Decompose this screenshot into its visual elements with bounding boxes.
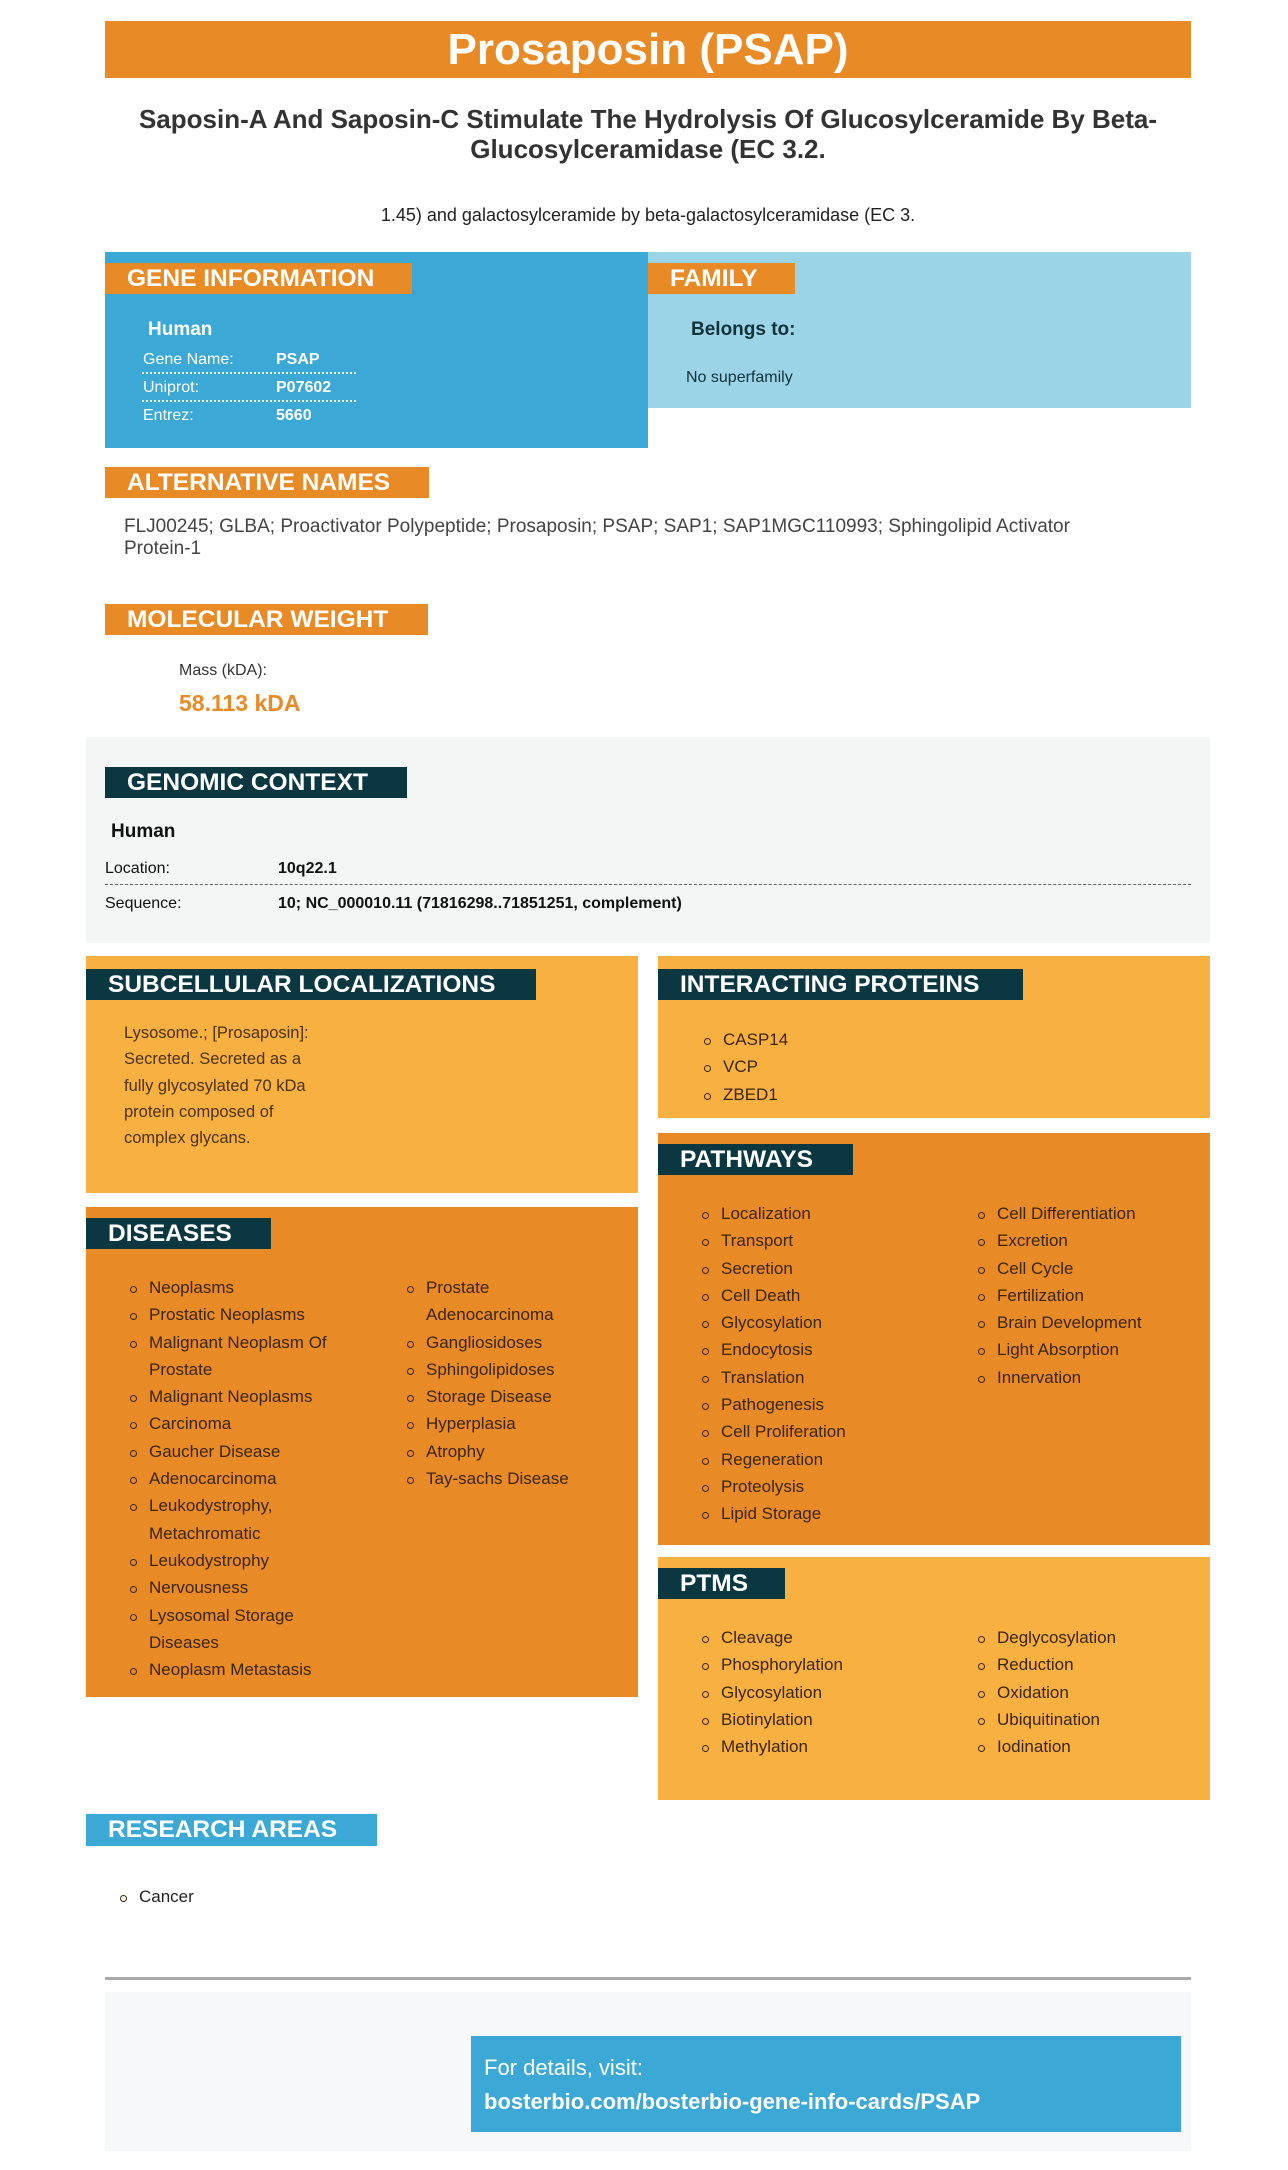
panel: ptms (658, 1557, 1210, 1800)
pathway list col 1: Regeneration (721, 1450, 823, 1469)
gene info text (142, 319, 356, 424)
ptm list col 2: Reduction (997, 1655, 1074, 1674)
heading: ptms (658, 1568, 785, 1599)
pathway list col 1 (702, 1204, 846, 1523)
footer panel (105, 1992, 1191, 2151)
family text: No superfamily (686, 369, 793, 386)
molecular weight value (179, 662, 300, 716)
subtitle: Saposin-A And Saposin-C Stimulate The Hydrolysis Of Glucosylceramide By Beta-Glucosylceramidase (EC 3.2. (139, 104, 1157, 164)
ptm list col 1: Glycosylation (721, 1683, 822, 1702)
disease list col 2: Prostate Adenocarcinoma (426, 1278, 554, 1324)
alternative names text: FLJ00245; GLBA; Proactivator Polypeptide; Prosaposin; PSAP; SAP1; SAP1MGC110993; Sphingolipid Activator Protein-1 (124, 516, 1070, 559)
disease list col 2: Tay-sachs Disease (426, 1469, 569, 1488)
panel: diseases (86, 1207, 638, 1697)
gene info text: Uniprot: (143, 379, 199, 396)
genomic details: 10q22.1 (278, 860, 337, 877)
panel: pathways (658, 1133, 1210, 1545)
heading: pathways (658, 1144, 853, 1175)
heading: gene information: GENE INFORMATION (127, 265, 374, 292)
heading: subcellular localizations: SUBCELLULAR LOCALIZATIONS (108, 971, 495, 998)
description: 1.45) and galactosylceramide by beta-galactosylceramidase (EC 3. (381, 205, 915, 225)
protein list: VCP (723, 1057, 758, 1076)
pathway list col 2: Fertilization (997, 1286, 1084, 1305)
disease list col 2: Storage Disease (426, 1387, 552, 1406)
protein list: CASP14 (723, 1030, 788, 1049)
callout: details link: For details, visit: (484, 2055, 643, 2080)
pathway list col 1: Proteolysis (721, 1477, 804, 1496)
heading: diseases: DISEASES (108, 1220, 232, 1247)
ptm list col 2: Ubiquitination (997, 1710, 1100, 1729)
disease list col 1: Neoplasm Metastasis (149, 1660, 312, 1679)
disease list col 1: Malignant Neoplasm Of Prostate (149, 1333, 327, 1379)
family text (686, 319, 796, 386)
genomic details: Human (111, 821, 175, 842)
research list: Cancer (139, 1887, 194, 1906)
ptm list col 1: Cleavage (721, 1628, 793, 1647)
pathway list col 1: Pathogenesis (721, 1395, 824, 1414)
genomic details: Sequence: (105, 895, 182, 912)
heading: family (648, 263, 795, 294)
pathway list col 1: Transport (721, 1231, 793, 1250)
pathway list col 1: Lipid Storage (721, 1504, 821, 1523)
disease list col 1: Leukodystrophy (149, 1551, 269, 1570)
gene info text: 5660 (276, 407, 312, 424)
molecular weight value: Mass (kDA): (179, 662, 267, 679)
disease list col 2: Gangliosidoses (426, 1333, 542, 1352)
disease list col 1: Lysosomal Storage Diseases (149, 1606, 294, 1652)
ptm list col 1: Biotinylation (721, 1710, 813, 1729)
gene info text: P07602 (276, 379, 331, 396)
pathway list col 2: Cell Differentiation (997, 1204, 1136, 1223)
heading: family: FAMILY (670, 265, 758, 292)
disease list col 2: Sphingolipidoses (426, 1360, 555, 1379)
ptm list col 1: Phosphorylation (721, 1655, 843, 1674)
callout: details link: bosterbio.com/bosterbio-gene-info-cards/PSAP (484, 2089, 980, 2114)
disease list col 1: Carcinoma (149, 1414, 231, 1433)
gene info text: Human (148, 319, 212, 340)
genomic details: 10; NC_000010.11 (71816298..71851251, complement) (278, 895, 682, 912)
title bar: Prosaposin (PSAP) (448, 25, 848, 74)
pathway list col 1: Glycosylation (721, 1313, 822, 1332)
heading: pathways: PATHWAYS (680, 1146, 813, 1173)
disease list col 2: Atrophy (426, 1442, 485, 1461)
heading: alternative names: ALTERNATIVE NAMES (127, 469, 390, 496)
disease list col 1: Malignant Neoplasms (149, 1387, 312, 1406)
disease list col 1: Neoplasms (149, 1278, 234, 1297)
pathway list col 1: Translation (721, 1368, 804, 1387)
panel: subcellular localizations (86, 956, 638, 1193)
pathway list col 2: Excretion (997, 1231, 1068, 1250)
disease list col 1: Gaucher Disease (149, 1442, 280, 1461)
gene info text: Entrez: (143, 407, 194, 424)
pathway list col 2: Light Absorption (997, 1340, 1119, 1359)
molecular weight value: 58.113 kDA (179, 690, 300, 716)
ptm list col 2: Oxidation (997, 1683, 1069, 1702)
callout: details link (471, 2036, 1181, 2132)
heading: interacting proteins: INTERACTING PROTEINS (680, 971, 979, 998)
pathway list col 2: Brain Development (997, 1313, 1142, 1332)
pathway list col 1: Endocytosis (721, 1340, 813, 1359)
genomic details (105, 821, 1191, 912)
heading: genomic context (105, 767, 407, 798)
pathway list col 1: Cell Proliferation (721, 1422, 846, 1441)
genomic details: Location: (105, 860, 170, 877)
panel: interacting proteins (658, 956, 1210, 1118)
heading: diseases (86, 1218, 271, 1249)
heading: genomic context: GENOMIC CONTEXT (127, 769, 368, 796)
protein list: ZBED1 (723, 1085, 778, 1104)
family text: Belongs to: (691, 319, 796, 340)
panel: genomic context (86, 737, 1210, 943)
gene info text: PSAP (276, 351, 320, 368)
gene info text: Gene Name: (143, 351, 234, 368)
pathway list col 2: Innervation (997, 1368, 1081, 1387)
disease list col 1: Leukodystrophy, Metachromatic (149, 1496, 272, 1543)
ptm list col 1: Methylation (721, 1737, 808, 1756)
disease list col 2: Hyperplasia (426, 1414, 516, 1433)
panel: gene information (105, 252, 648, 448)
ptm list col 2 (978, 1628, 1116, 1756)
panel: family (648, 252, 1191, 408)
disease list col 2 (407, 1278, 569, 1488)
title bar (105, 21, 1191, 78)
ptm list col 1 (702, 1628, 843, 1756)
pathway list col 2 (978, 1204, 1142, 1387)
heading: research areas: RESEARCH AREAS (108, 1816, 337, 1843)
disease list col 1: Prostatic Neoplasms (149, 1305, 305, 1324)
ptm list col 2: Deglycosylation (997, 1628, 1116, 1647)
heading: research areas (86, 1814, 377, 1846)
disease list col 1 (130, 1278, 327, 1679)
pathway list col 1: Cell Death (721, 1286, 800, 1305)
ptm list col 2: Iodination (997, 1737, 1071, 1756)
heading: ptms: PTMS (680, 1570, 748, 1597)
localization text: Lysosome.; [Prosaposin]: Secreted. Secreted as a fully glycosylated 70 kDa protein composed of complex glycans. (124, 1024, 309, 1147)
pathway list col 1: Localization (721, 1204, 811, 1223)
pathway list col 2: Cell Cycle (997, 1259, 1074, 1278)
disease list col 1: Nervousness (149, 1578, 248, 1597)
heading: molecular weight: MOLECULAR WEIGHT (127, 606, 388, 633)
protein list (704, 1030, 788, 1104)
disease list col 1: Adenocarcinoma (149, 1469, 277, 1488)
pathway list col 1: Secretion (721, 1259, 793, 1278)
